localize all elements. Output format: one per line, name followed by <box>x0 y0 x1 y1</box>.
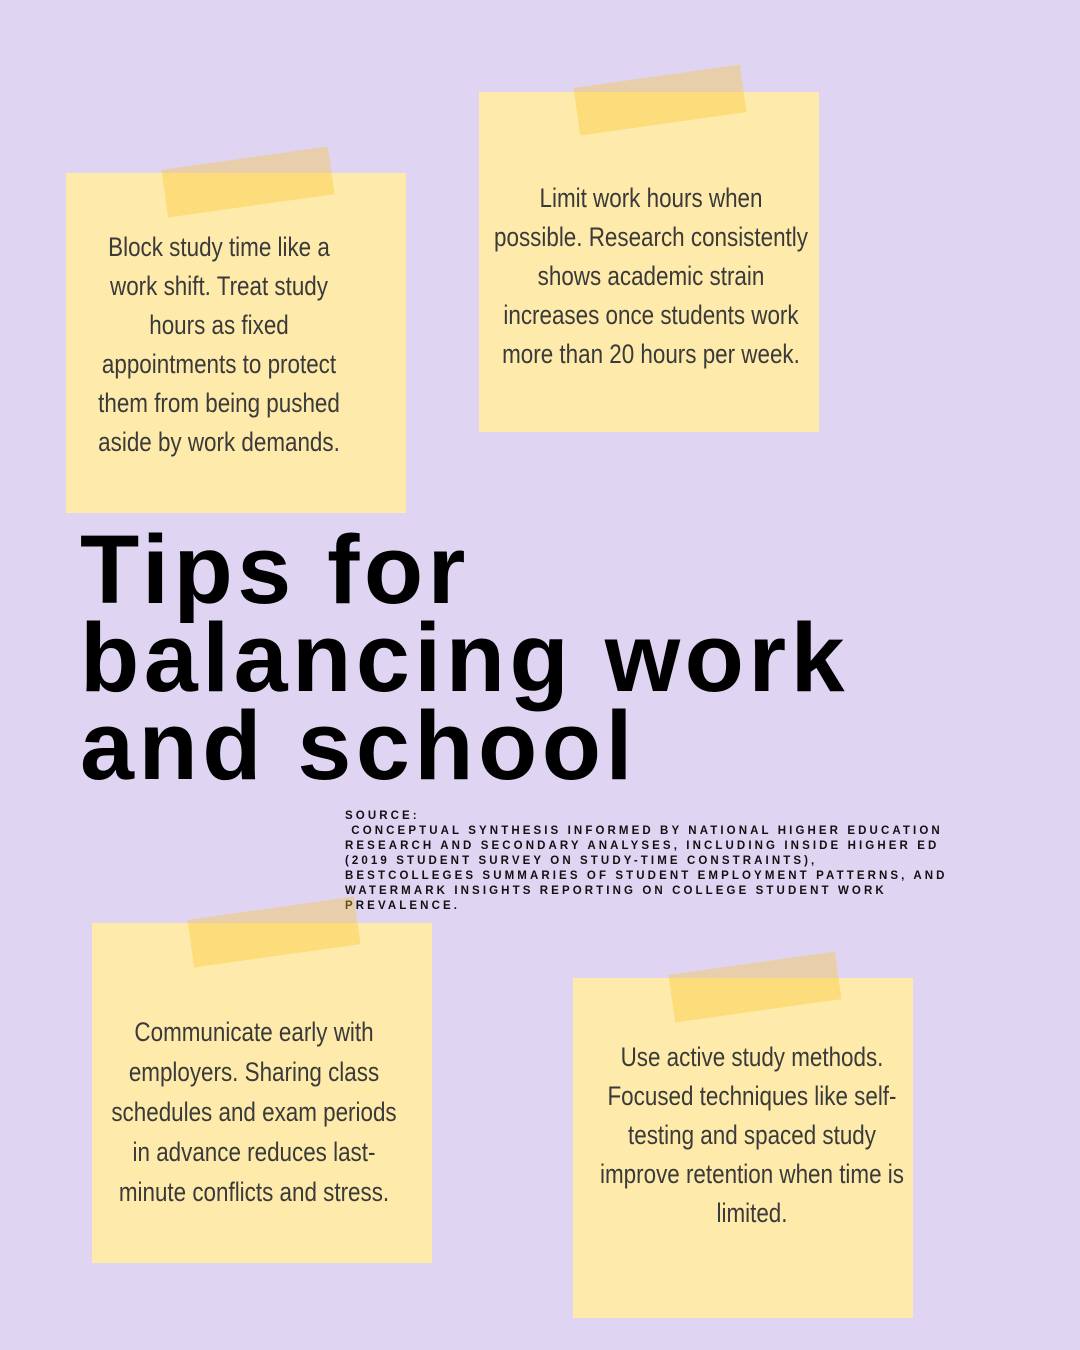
text: note 3: schedules and exam periods <box>111 1097 397 1127</box>
title: balancing work <box>80 603 849 712</box>
tape: note 4 <box>668 952 842 1022</box>
text: note 2 <box>494 183 808 369</box>
tape: note 2 <box>573 65 747 135</box>
text: note 4 <box>600 1042 904 1228</box>
text: note 1: appointments to protect <box>102 349 336 379</box>
title: Tips for <box>80 515 470 624</box>
note 3: communicate early <box>92 923 432 1263</box>
note 2: limit work hours <box>479 92 819 432</box>
source text: PREVALENCE. <box>345 900 460 912</box>
text: note 3: minute conflicts and stress. <box>119 1177 389 1207</box>
source text <box>345 810 948 912</box>
text: note 3: Communicate early with <box>134 1017 374 1047</box>
text: note 4: improve retention when time is <box>600 1159 904 1189</box>
note 1: block study time <box>66 173 406 513</box>
text: note 1: hours as fixed <box>149 310 289 340</box>
text: note 2: more than 20 hours per week. <box>502 339 800 369</box>
title: and school <box>80 691 637 800</box>
source text: WATERMARK INSIGHTS REPORTING ON COLLEGE STUDENT WORK <box>345 885 887 897</box>
text: note 3: employers. Sharing class <box>129 1057 379 1087</box>
source text: SOURCE: <box>345 810 420 822</box>
text: note 1: Block study time like a <box>108 232 330 262</box>
text: note 4: Focused techniques like self- <box>607 1081 896 1111</box>
text: note 3 <box>111 1017 397 1207</box>
text: note 4: limited. <box>716 1198 787 1228</box>
tape: note 1 <box>161 147 335 217</box>
text: note 3: in advance reduces last- <box>133 1137 375 1167</box>
text: note 1: work shift. Treat study <box>110 271 328 301</box>
source text: BESTCOLLEGES SUMMARIES OF STUDENT EMPLOYMENT PATTERNS, AND <box>345 870 948 882</box>
text: note 2: possible. Research consistently <box>494 222 808 252</box>
title <box>80 515 849 800</box>
text: note 4: Use active study methods. <box>621 1042 883 1072</box>
text: note 1: aside by work demands. <box>98 427 340 457</box>
note 4: active study methods <box>573 978 913 1318</box>
text: note 1 <box>98 232 340 457</box>
text: note 2: Limit work hours when <box>540 183 762 213</box>
tape: note 3 <box>187 897 361 967</box>
source text: RESEARCH AND SECONDARY ANALYSES, INCLUDING INSIDE HIGHER ED <box>345 840 939 852</box>
source text: CONCEPTUAL SYNTHESIS INFORMED BY NATIONAL HIGHER EDUCATION <box>351 825 943 837</box>
text: note 1: them from being pushed <box>98 388 340 418</box>
source text: (2019 STUDENT SURVEY ON STUDY-TIME CONSTRAINTS), <box>345 855 817 867</box>
text: note 2: increases once students work <box>503 300 799 330</box>
text: note 4: testing and spaced study <box>628 1120 876 1150</box>
text: note 2: shows academic strain <box>538 261 764 291</box>
